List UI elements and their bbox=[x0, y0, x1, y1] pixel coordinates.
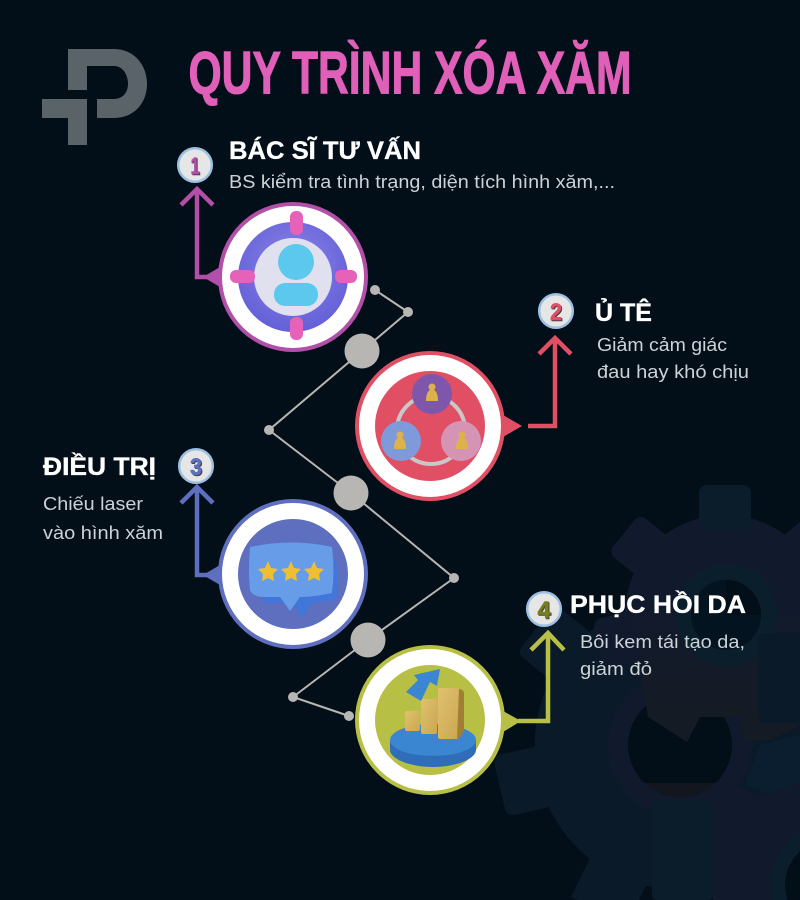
icon: step 4 growth chart bbox=[357, 647, 503, 793]
heading: step 3: ĐIỀU TRỊ bbox=[43, 452, 156, 481]
text: step 1: BS kiểm tra tình trạng, diện tích hình xăm,... bbox=[229, 172, 615, 192]
text: step 2: đau hay khó chịu bbox=[597, 362, 749, 382]
step 2 panel bbox=[357, 294, 749, 499]
text: step 4: giảm đỏ bbox=[580, 659, 652, 679]
heading: step 4: PHỤC HỒI DA bbox=[570, 589, 746, 619]
step 3 panel bbox=[43, 449, 366, 647]
badge: number 1: 1 bbox=[190, 153, 200, 180]
arrow: step 4 bbox=[503, 633, 564, 732]
badge: number 2 bbox=[539, 294, 573, 328]
arrow: step 2 bbox=[503, 338, 571, 437]
icon: step 2 three people bbox=[357, 353, 503, 499]
text: step 4 bbox=[580, 632, 745, 679]
logo bbox=[42, 49, 147, 145]
badge: number 3 bbox=[179, 449, 213, 483]
text: step 3: Chiếu laser bbox=[43, 494, 143, 514]
heading: step 1: BÁC SĨ TƯ VẤN bbox=[229, 135, 421, 165]
badge: number 3: 3 bbox=[190, 454, 202, 481]
icon: step 1 target person bbox=[220, 204, 366, 350]
badge: number 4: 4 bbox=[538, 597, 551, 624]
badge: number 1 bbox=[178, 148, 212, 182]
title: QUY TRÌNH XÓA XĂM bbox=[188, 40, 632, 106]
badge: number 2: 2 bbox=[550, 299, 562, 326]
text: step 3: vào hình xăm bbox=[43, 523, 163, 543]
text: step 4: Bôi kem tái tạo da, bbox=[580, 632, 745, 652]
text: step 2: Giảm cảm giác bbox=[597, 335, 727, 355]
icon: step 3 rating bubble bbox=[220, 501, 366, 647]
badge: number 4 bbox=[527, 592, 561, 626]
text: step 3 bbox=[43, 494, 163, 543]
heading: step 2: Ủ TÊ bbox=[595, 297, 652, 327]
arrow: step 1 bbox=[181, 189, 225, 287]
connector network bbox=[264, 285, 459, 721]
text: step 2 bbox=[597, 335, 749, 382]
step 4 panel bbox=[357, 589, 746, 793]
background gears bbox=[493, 485, 800, 900]
arrow: step 3 bbox=[181, 487, 225, 585]
step 1 panel bbox=[178, 135, 615, 350]
